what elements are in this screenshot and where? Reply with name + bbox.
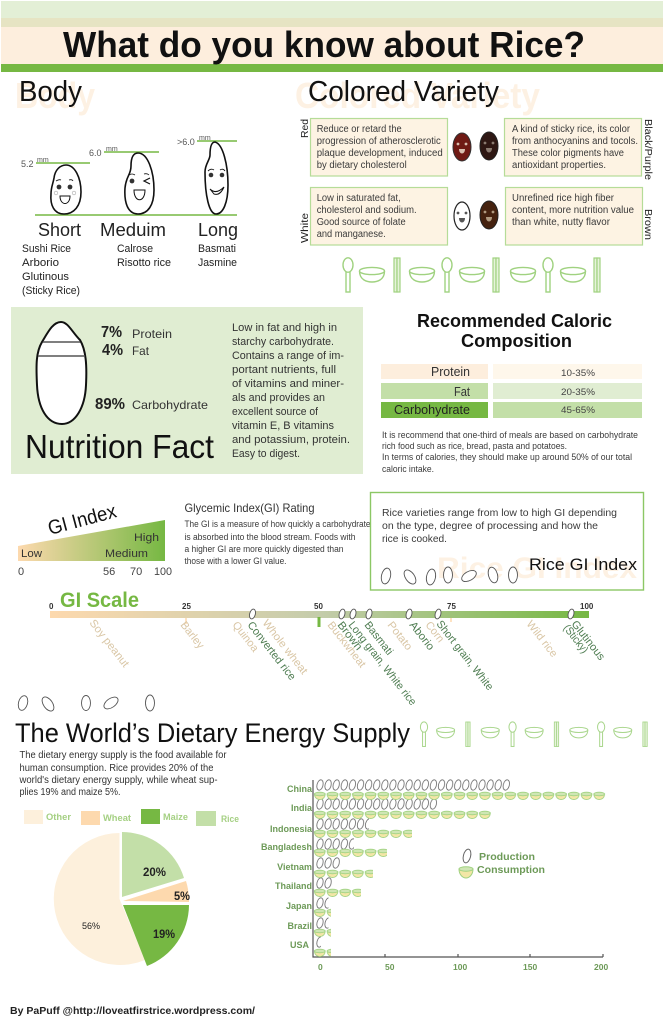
scale ticks: 75 (447, 602, 456, 611)
heading: body: Body (19, 76, 82, 108)
scale ticks: 100 (580, 602, 594, 611)
short label and varieties (22, 220, 81, 297)
card: red: by dietary cholesterol (317, 160, 407, 171)
scale food labels: Barley (178, 619, 206, 652)
utensils row (343, 258, 600, 292)
table: caloric ranges: 10-35% (561, 368, 596, 379)
heading: rice GI index: Rice GI Index (529, 556, 638, 574)
chart: GI index wedge: 100 (154, 566, 172, 578)
chart: GI index wedge: 70 (130, 566, 142, 578)
header banner (1, 1, 663, 72)
scale food labels: Aborio (407, 619, 436, 653)
nutrition percentages: Fat (132, 344, 150, 358)
card: white: and manganese. (317, 229, 386, 240)
size labels: mm (37, 157, 49, 164)
short label and varieties: Sushi Rice (22, 243, 71, 255)
size labels: >6.0 (177, 137, 195, 147)
scale food labels: Long grain, White rice (346, 619, 419, 708)
rice GI description: on the type, degree of processing and how the (382, 520, 598, 532)
card: black purple: antioxidant properties. (512, 160, 606, 171)
caloric note: It is recommend that one-third of meals are based on carbohydrate (382, 430, 638, 440)
scale food labels: Buckwheat (325, 619, 368, 670)
axis values: 50 (385, 962, 395, 972)
rice GI description (382, 507, 617, 545)
panel: recommended caloric composition (381, 311, 642, 474)
icon: long grain (205, 142, 228, 214)
side labels: Red (299, 119, 311, 138)
panel: colored variety: Colored Variety (295, 75, 540, 116)
text block: glycemic index rating: is absorbed into the blood stream. Foods with (184, 532, 356, 542)
axis values: 200 (594, 962, 608, 972)
pie legend (24, 809, 239, 826)
nutrition description: and potassium, protein. (232, 434, 350, 446)
chart: GI index wedge: High (134, 532, 159, 544)
scale food labels: Wild rice (524, 618, 560, 660)
card: brown: than white, nutty flavor (512, 217, 611, 228)
nutrition percentages: Carbohydrate (132, 398, 208, 412)
medium label and varieties: Risotto rice (117, 257, 171, 269)
size labels: mm (199, 135, 211, 142)
country labels: Japan (286, 901, 312, 911)
long label and varieties (198, 220, 238, 269)
nutrition description: als and provides an (232, 392, 325, 404)
short label and varieties: Glutinous (22, 271, 69, 283)
side labels: Black/Purple (642, 119, 654, 180)
card: brown: content, more nutrition value (512, 205, 634, 216)
text block: glycemic index rating: Glycemic Index(GI) Rating (184, 501, 314, 515)
panel: nutrition fact (11, 307, 363, 474)
panel: colored variety (295, 75, 654, 292)
heading: caloric composition: Recommended Caloric (417, 311, 612, 331)
text block: glycemic index rating: The GI is a measure of how quickly a carbohydrate (184, 519, 370, 529)
nutrition percentages (95, 324, 208, 413)
chart: production and consumption (261, 778, 608, 972)
table: caloric ranges: Carbohydrate (394, 403, 470, 417)
scale food labels: Converted rice (245, 619, 298, 683)
icons: rice grains (380, 566, 518, 586)
icon: medium grain (125, 153, 154, 214)
heading: caloric composition: Composition (461, 331, 572, 351)
axis values: 0 (318, 962, 323, 972)
short label and varieties: Arborio (22, 257, 59, 269)
pie legend: Maize (163, 812, 188, 822)
chart: GI index wedge: Medium (105, 548, 148, 560)
chart: GI index wedge: Low (21, 548, 42, 560)
nutrition description (232, 322, 350, 460)
icons: loose rice grains (17, 695, 155, 713)
country labels: Brazil (287, 921, 312, 931)
scale food labels: Corn (423, 619, 446, 645)
short label and varieties: Short (38, 220, 81, 240)
panel: body: Body (15, 75, 95, 116)
nutrition percentages: 4% (102, 342, 123, 359)
card: black purple: These color pigments have (512, 148, 624, 159)
nutrition description: of vitamins and miner- (232, 378, 344, 390)
chart: GI index wedge: 56 (103, 566, 115, 578)
scale food labels: (Sticky) (561, 622, 590, 656)
text block: dietary energy description: The dietary energy supply is the food available for (20, 750, 227, 761)
scale food labels: Whole wheat (260, 617, 310, 677)
country labels: India (291, 803, 313, 813)
scale food labels: Potato (385, 619, 414, 653)
text block: glycemic index rating: a higher GI are more quickly digested than (184, 544, 344, 554)
panel: body (15, 75, 238, 297)
nutrition percentages: Protein (132, 327, 172, 341)
scale food labels (87, 617, 607, 708)
card: red: progression of atherosclerotic (317, 136, 441, 147)
heading: world's dietary energy supply: The World’s Dietary Energy Supply (15, 718, 410, 748)
scale food labels: Short grain, White (434, 618, 495, 693)
nutrition percentages: 7% (101, 324, 122, 341)
scale ticks (49, 602, 594, 611)
long label and varieties: Jasmine (198, 257, 237, 269)
text block: glycemic index rating: those with a lower GI value. (184, 556, 286, 566)
table: caloric ranges (381, 364, 642, 418)
card: red (310, 118, 448, 176)
text block: dietary energy description: human consumption. Rice provides 20% of the (20, 763, 214, 774)
chart: pie dietary supply (54, 832, 190, 966)
card: white: Low in saturated fat, (317, 193, 401, 204)
card: white: Good source of folate (317, 217, 406, 228)
long label and varieties: Basmati (198, 243, 236, 255)
size labels: mm (106, 146, 118, 153)
text block: dietary energy description: world's dietary energy supply, while wheat sup- (19, 775, 218, 786)
card: white: cholesterol and sodium. (317, 205, 417, 216)
nutrition description: portant nutrients, full (232, 364, 336, 376)
nutrition description: Easy to digest. (232, 448, 300, 460)
long label and varieties: Long (198, 220, 238, 240)
nutrition description: Low in fat and high in (232, 322, 337, 334)
medium label and varieties: Meduim (100, 220, 166, 240)
card: black purple: A kind of sticky rice, its color (512, 124, 631, 135)
axis values: 150 (523, 962, 537, 972)
country labels (261, 784, 313, 950)
country labels: China (287, 784, 313, 794)
country labels: USA (290, 940, 309, 950)
icon: nutrition grain (37, 322, 86, 424)
chart: pie dietary supply: 20% (143, 865, 166, 879)
caloric note: caloric intake. (382, 464, 434, 474)
country labels: Bangladesh (261, 842, 312, 852)
title: What do you know about Rice? (63, 24, 585, 65)
heading: GI scale: GI Scale (60, 589, 139, 612)
size guide lines (35, 141, 237, 215)
utensils row: pale (420, 722, 647, 746)
text block: glycemic index rating (184, 501, 370, 566)
card: white (310, 188, 448, 245)
heading: nutrition fact: Nutrition Fact (25, 428, 214, 465)
chart: GI scale (49, 589, 607, 708)
size labels: 6.0 (89, 148, 102, 158)
chart legend: Production (479, 851, 535, 863)
scale rice markers (249, 608, 575, 620)
heading: caloric composition (417, 311, 612, 351)
credit: By PaPuff @http://loveatfirstrice.wordpress.com/ (10, 1005, 255, 1017)
chart axes (313, 780, 603, 957)
scale ticks: 25 (182, 602, 191, 611)
rice GI description: Rice varieties range from low to high GI depending (382, 507, 617, 519)
table: caloric ranges: Protein (431, 365, 470, 379)
medium label and varieties: Calrose (117, 243, 153, 255)
scale food labels: Basmati (362, 619, 395, 658)
size labels (21, 135, 211, 169)
medium label and varieties (100, 220, 171, 269)
chart legend (459, 848, 545, 878)
side labels: Brown (642, 209, 654, 240)
pie legend: Rice (221, 814, 239, 824)
country labels: Indonesia (270, 824, 313, 834)
card: red: plaque development, induced (317, 148, 443, 159)
scale bar (50, 611, 589, 618)
scale food labels: Glutinous (569, 618, 607, 663)
heading: colored variety: Colored Variety (308, 76, 499, 108)
nutrition description: vitamin E, B vitamins (232, 420, 334, 432)
chart: pie dietary supply: 5% (174, 889, 190, 903)
consumption bowl rows (314, 790, 606, 957)
scale ticks: 0 (49, 602, 54, 611)
scale food labels: Soy peanut (87, 617, 131, 670)
text block: dietary energy description: plies 19% and maize 5%. (20, 787, 120, 798)
country labels: Thailand (275, 881, 312, 891)
text block: dietary energy description (19, 750, 227, 798)
chart: pie dietary supply: 19% (153, 927, 175, 941)
production grain rows (316, 778, 510, 949)
icon: black grain (480, 132, 498, 160)
panel: rice GI index (370, 492, 644, 590)
nutrition description: starchy carbohydrate. (232, 336, 334, 348)
side labels (299, 119, 654, 243)
axis values: 100 (453, 962, 467, 972)
chart: GI index wedge: GI Index (46, 500, 119, 540)
nutrition percentages: 89% (95, 396, 125, 413)
chart legend: Consumption (477, 864, 545, 876)
caloric note (382, 430, 638, 474)
country labels: Vietnam (277, 862, 312, 872)
card: red: Reduce or retard the (317, 124, 402, 135)
caloric note: rich food such as rice, bread, pasta and potatoes. (382, 441, 567, 451)
table: caloric ranges: 45-65% (561, 405, 596, 416)
nutrition description: excellent source of (232, 406, 319, 418)
icon: short grain (51, 165, 81, 214)
card: black purple: from anthocyanins and tocols. (512, 136, 638, 147)
rice GI description: rice is cooked. (382, 533, 447, 545)
nutrition description: Contains a range of im- (232, 350, 344, 362)
icon: white grain (454, 202, 470, 230)
pie legend: Wheat (103, 813, 131, 823)
chart: pie dietary supply: 56% (82, 921, 100, 931)
card: brown (506, 188, 642, 245)
chart: GI index wedge (18, 500, 172, 578)
card: brown: Unrefined rice high fiber (512, 193, 615, 204)
card: black purple (504, 118, 642, 176)
size labels: 5.2 (21, 159, 34, 169)
chart: GI index wedge: 0 (18, 566, 24, 578)
pie legend: Other (46, 812, 72, 822)
icon: brown grain (480, 201, 498, 229)
scale ticks: 50 (314, 602, 323, 611)
axis values (318, 962, 608, 972)
table: caloric ranges: Fat (454, 385, 470, 399)
side labels: White (299, 213, 311, 243)
caloric note: In terms of calories, they should make up around 50% of our total (382, 452, 632, 462)
scale food labels: Brown (335, 619, 364, 653)
icon: red grain (453, 133, 471, 161)
short label and varieties: (Sticky Rice) (22, 285, 80, 297)
scale food labels: Quinoa (230, 619, 261, 655)
panel: rice GI index: Rice GI Index (437, 552, 637, 585)
table: caloric ranges: 20-35% (561, 387, 596, 398)
